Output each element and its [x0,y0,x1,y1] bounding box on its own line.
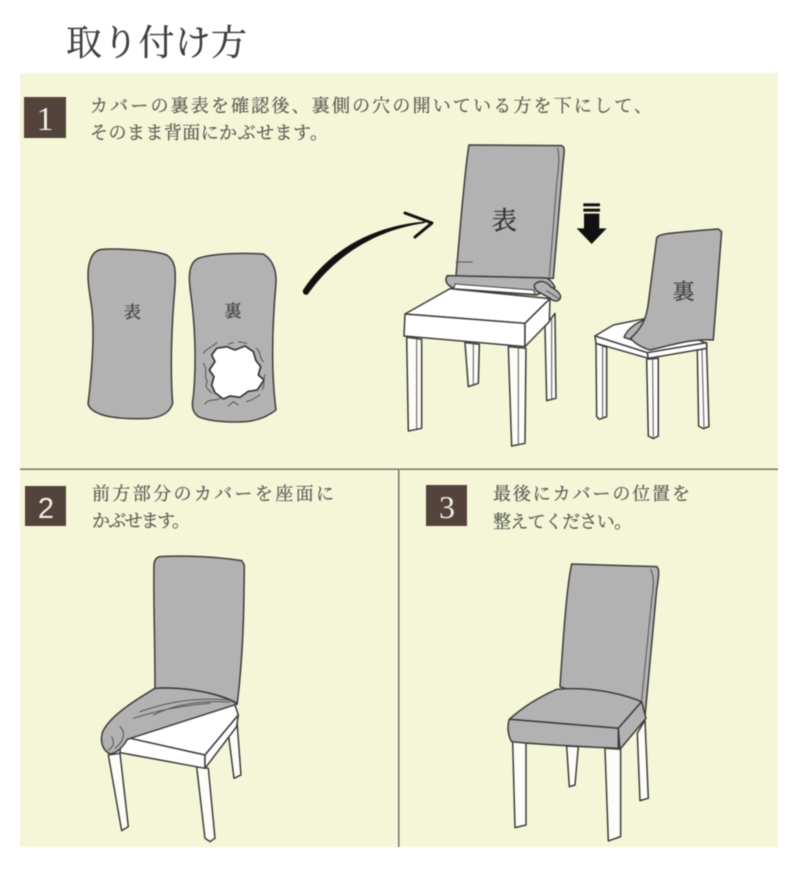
title: 取り付け方 [66,23,247,63]
flat cover: front side: 表 [124,303,141,322]
step 2 text: かぶせます。 [92,511,190,531]
chair: cover partly pulled over seat [101,556,244,842]
chair back cover with 表 label [456,145,564,278]
step 1 panel [24,96,722,446]
legs [596,343,607,419]
step 2 badge: 2 [38,493,54,525]
flat cover: front side [88,249,175,419]
seat cover [509,689,642,728]
chair back cover with 表 label: 表 [492,207,517,235]
down arrow [577,203,607,244]
step 3 text: 最後にカバーの位置を [493,484,690,504]
chair: rear view with cover on back: 裏 [673,279,695,304]
rolled cover hem [446,276,555,295]
chair: fully covered [508,564,659,841]
legs [108,753,128,831]
draped cover with folds [101,688,237,754]
step 3 badge [426,485,467,526]
step 1 text [90,96,652,143]
step 3 panel [426,484,690,841]
curved arrow [303,213,432,295]
back cover with 裏 label [631,229,722,350]
inner fold of cover on seat [624,319,647,340]
flat cover: reverse side with opening [189,253,276,422]
step 2 badge [25,486,66,526]
step 1 text: そのまま背面にかぶせます。 [90,123,328,143]
step 2 panel [25,484,334,842]
chair: rear view with cover on back [595,229,722,439]
step 1 badge [24,97,66,138]
seat [130,700,238,755]
step 3 text [493,484,690,532]
seat [405,289,550,323]
flat cover: reverse side with opening: 裏 [224,302,241,321]
step 2 text: 前方部分のカバーを座面に [92,484,334,504]
legs [407,337,422,431]
chair: front view with cover on back [404,145,564,446]
back cover [560,564,659,717]
step 2 text [92,484,334,531]
step 1 badge: 1 [36,101,54,138]
strap on hem [534,281,561,301]
legs [513,742,526,828]
back cover [154,556,244,703]
step 3 text: 整えてください。 [493,512,632,532]
seat [595,318,707,358]
step 1 text: カバーの裏表を確認後、裏側の穴の開いている方を下にして、 [90,96,652,116]
step 3 badge: 3 [439,489,455,525]
